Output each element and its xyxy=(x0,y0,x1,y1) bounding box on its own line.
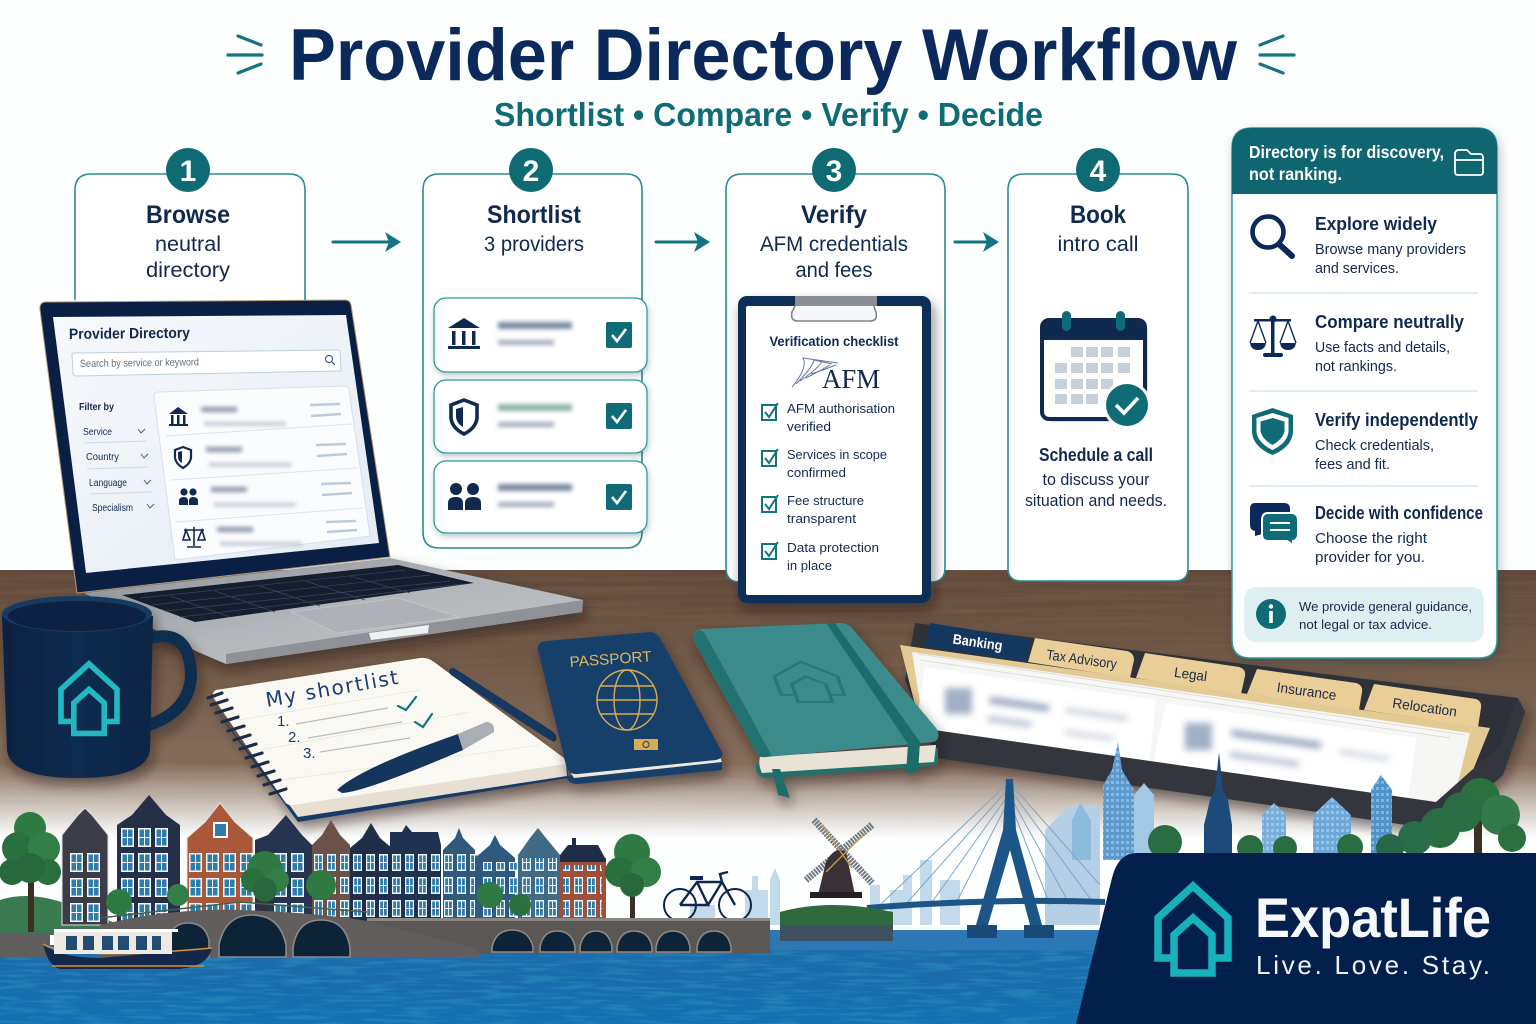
step 1 text: neutral xyxy=(155,233,221,256)
checkbox xyxy=(606,403,632,429)
clipboard clip xyxy=(792,296,877,321)
row: explore widely: Explore widely xyxy=(1315,213,1438,234)
row: verify independently xyxy=(1252,408,1479,473)
icon: people xyxy=(448,483,481,510)
house 9 xyxy=(475,835,520,925)
list numbers: 1. xyxy=(277,713,290,730)
canal bridge and quay xyxy=(0,902,770,958)
blurred provider name xyxy=(498,322,572,345)
row: decide with confidence: provider for you. xyxy=(1315,550,1425,566)
windmill xyxy=(780,820,893,941)
results list xyxy=(154,386,370,560)
notebook: my shortlist xyxy=(208,658,568,822)
icon: bank xyxy=(448,318,480,349)
wooden desk xyxy=(0,570,1536,850)
brand tagline: Live. Love. Stay. xyxy=(1256,950,1490,980)
ribbon xyxy=(772,769,790,798)
spiral binding xyxy=(208,693,286,794)
list numbers: 2. xyxy=(288,729,301,746)
icon: scales xyxy=(1250,316,1296,357)
title accent left xyxy=(228,36,262,73)
step 1 text: Browse xyxy=(146,201,230,229)
AFM logo xyxy=(792,358,880,394)
handwritten checks xyxy=(398,697,432,727)
tab: relocation xyxy=(1364,684,1481,727)
house 8 xyxy=(442,828,481,925)
trees behind logo xyxy=(1148,778,1526,862)
step 2 card: shortlist xyxy=(423,148,647,548)
paper stack xyxy=(912,652,1470,815)
notebook spine xyxy=(693,630,772,757)
bicycle xyxy=(664,872,751,921)
notebook back cover xyxy=(756,748,938,778)
checklist items: AFM authorisation xyxy=(787,401,895,416)
schedule text: Schedule a call xyxy=(1039,445,1153,465)
church tower xyxy=(1204,752,1232,860)
row: compare neutrally: not rankings. xyxy=(1315,359,1397,375)
tab: insurance xyxy=(1247,669,1362,710)
tan folder back xyxy=(900,645,1490,790)
row: explore widely xyxy=(1252,213,1466,277)
bridge deck xyxy=(867,901,1105,908)
checklist items: Fee structure xyxy=(787,493,864,508)
notebook front cover xyxy=(693,623,939,757)
tab: legal: Legal xyxy=(1173,664,1208,684)
icon: calendar check xyxy=(1103,381,1151,429)
house 7 xyxy=(390,825,442,925)
bridge cables xyxy=(880,782,1100,905)
badge 4: 4 xyxy=(1090,155,1107,188)
laptop screen xyxy=(53,315,379,573)
info note xyxy=(1244,587,1484,642)
AFM logo: AFM xyxy=(822,364,880,394)
arches xyxy=(168,915,731,958)
green notebook xyxy=(693,623,939,798)
quay wall left xyxy=(0,933,50,957)
filter sidebar: Language xyxy=(89,478,127,489)
icon: magnifier xyxy=(1252,216,1292,256)
passport xyxy=(538,632,722,784)
row: decide with confidence: Choose the right xyxy=(1315,531,1427,547)
step 4 text xyxy=(1058,201,1138,256)
checklist items: Data protection xyxy=(787,540,879,555)
info note: not legal or tax advice. xyxy=(1299,617,1432,632)
provider card: shield xyxy=(434,380,647,453)
step 4 text: intro call xyxy=(1058,233,1138,256)
icon: speech bubbles xyxy=(1250,503,1298,545)
clipboard: verification checklist xyxy=(738,296,931,603)
laptop xyxy=(40,300,583,664)
step 1 card: browse xyxy=(75,148,305,300)
screen heading: Provider Directory xyxy=(69,325,191,343)
water canal xyxy=(0,930,1110,1024)
badge 3 xyxy=(812,148,856,192)
elastic band xyxy=(826,623,920,773)
windmill sails xyxy=(806,820,872,883)
step 4 text: Book xyxy=(1070,201,1126,229)
title xyxy=(228,15,1294,96)
pen on desk xyxy=(449,668,557,742)
notebook pages xyxy=(759,745,936,773)
row: decide with confidence xyxy=(1250,502,1483,566)
house 4 xyxy=(255,815,312,925)
brand name: ExpatLife xyxy=(1255,886,1491,949)
list numbers: 3. xyxy=(303,745,316,762)
badge 2 xyxy=(509,148,553,192)
tree 4 xyxy=(106,882,531,916)
badge 1: 1 xyxy=(180,155,196,188)
info note: We provide general guidance, xyxy=(1299,599,1472,614)
checkbox xyxy=(606,322,632,348)
laptop lid xyxy=(40,300,390,593)
row: compare neutrally xyxy=(1250,311,1465,375)
house 11 xyxy=(560,838,606,925)
step 1 text xyxy=(146,201,231,282)
filter sidebar: Country xyxy=(86,452,119,463)
windmill island xyxy=(780,905,893,938)
search box: Search by service or keyword xyxy=(80,356,199,370)
icon: shield teal xyxy=(1252,408,1293,455)
file tray with tabbed dividers xyxy=(900,623,1525,830)
step 2 text: Shortlist xyxy=(487,201,582,229)
panel header: Directory is for discovery, xyxy=(1249,142,1444,162)
arrow 3 to 4 xyxy=(955,232,999,252)
badge 2: 2 xyxy=(523,155,539,188)
panel header: not ranking. xyxy=(1249,164,1342,184)
filter sidebar: Service xyxy=(83,427,112,438)
handwritten title: My shortlist xyxy=(264,665,400,712)
blurred index cards xyxy=(915,667,1416,810)
right info panel xyxy=(1232,128,1497,658)
windmill tower xyxy=(818,850,855,895)
checklist items: verified xyxy=(787,419,831,434)
schedule text: situation and needs. xyxy=(1025,492,1167,510)
tree 5 xyxy=(605,834,661,922)
embossed logo xyxy=(769,662,847,702)
tab: legal xyxy=(1136,653,1245,694)
provider card: people xyxy=(434,461,647,533)
icon: people small xyxy=(179,488,198,505)
tab: insurance: Insurance xyxy=(1276,679,1338,703)
tab: banking xyxy=(925,623,1030,662)
schedule text: to discuss your xyxy=(1042,471,1150,489)
blurred provider name xyxy=(498,404,572,427)
house 3 xyxy=(187,803,255,925)
row: verify independently: Verify independently xyxy=(1315,409,1479,430)
house 10 xyxy=(518,828,560,925)
main title text: Provider Directory Workflow xyxy=(289,15,1237,96)
checklist items: confirmed xyxy=(787,465,846,480)
step 1 text: directory xyxy=(146,259,231,282)
icon: folder xyxy=(1455,150,1483,175)
step 4 card: book xyxy=(1008,148,1188,581)
checklist heading: Verification checklist xyxy=(770,333,899,349)
checklist items: in place xyxy=(787,558,832,573)
icon: scales small xyxy=(183,527,205,547)
schedule text xyxy=(1025,445,1167,510)
badge 3: 3 xyxy=(826,155,842,188)
laptop base xyxy=(84,558,583,664)
icon: info xyxy=(1256,599,1286,629)
step 3 text: AFM credentials xyxy=(760,233,908,256)
house 5 xyxy=(312,820,351,925)
icon: calendar xyxy=(1041,311,1151,429)
mug handle xyxy=(146,636,191,726)
canal boat xyxy=(43,929,212,969)
expatlife brand block xyxy=(1076,853,1536,1024)
tab: banking: Banking xyxy=(952,631,1004,653)
title accent right xyxy=(1260,36,1294,73)
keyboard xyxy=(122,565,474,640)
filter sidebar: Specialism xyxy=(92,503,133,514)
tab: tax advisory: Tax Advisory xyxy=(1045,646,1118,672)
tree 2 xyxy=(241,851,289,910)
erasmus bridge xyxy=(867,779,1105,938)
tray front wall xyxy=(934,698,1525,829)
list numbers xyxy=(277,713,316,762)
canal houses xyxy=(62,795,606,925)
tree 3 xyxy=(306,870,336,900)
row: verify independently: Check credentials, xyxy=(1315,438,1434,454)
filter sidebar xyxy=(79,402,154,514)
arched stone bridge xyxy=(100,910,480,958)
row: decide with confidence: Decide with confidence xyxy=(1315,502,1483,523)
house 6 xyxy=(350,823,392,925)
blurred provider name xyxy=(498,484,572,507)
checklist items: Services in scope xyxy=(787,447,887,462)
trees left xyxy=(0,812,661,932)
panel header xyxy=(1232,128,1497,194)
checklist items: transparent xyxy=(787,511,856,526)
mug xyxy=(2,596,191,778)
passport globe xyxy=(597,670,657,730)
bushes behind quay xyxy=(0,896,120,935)
row: compare neutrally: Use facts and details, xyxy=(1315,340,1450,356)
provider card: bank xyxy=(434,298,647,372)
icon: shield small xyxy=(175,447,191,468)
passport chip xyxy=(634,739,658,750)
row: verify independently: fees and fit. xyxy=(1315,457,1390,473)
badge 1 xyxy=(166,148,210,192)
passport label: PASSPORT xyxy=(569,648,652,671)
icon: bank small xyxy=(169,407,188,426)
badge 4 xyxy=(1076,148,1120,192)
filter sidebar: Filter by xyxy=(79,402,114,413)
arrow 2 to 3 xyxy=(656,232,710,252)
bridge pylon xyxy=(976,779,1042,925)
pen on notebook xyxy=(337,722,494,793)
brand logo xyxy=(1158,886,1228,973)
search box xyxy=(72,350,341,376)
tray back xyxy=(905,623,1525,830)
row: explore widely: Browse many providers xyxy=(1315,242,1466,258)
house 2 xyxy=(117,795,180,925)
step 3 text: Verify xyxy=(801,201,867,229)
rotterdam skyline right xyxy=(1045,742,1392,925)
blurred rows xyxy=(201,407,302,546)
checklist items xyxy=(762,401,895,573)
subtitle: Shortlist • Compare • Verify • Decide xyxy=(494,96,1043,133)
arrow 1 to 2 xyxy=(333,232,401,252)
icon: shield xyxy=(451,400,477,434)
tab: tax advisory xyxy=(1028,638,1134,678)
row: compare neutrally: Compare neutrally xyxy=(1315,311,1465,332)
step 2 text: 3 providers xyxy=(484,233,584,256)
step 2 text xyxy=(484,201,584,256)
row: explore widely: and services. xyxy=(1315,261,1399,277)
long quay xyxy=(367,920,770,953)
step 3 card: verify xyxy=(726,148,945,582)
checkbox xyxy=(606,484,632,510)
distant skyline left xyxy=(690,860,960,925)
tab: relocation: Relocation xyxy=(1391,695,1458,719)
tree 1 xyxy=(0,812,61,932)
mug logo xyxy=(61,664,117,733)
step 3 text: and fees xyxy=(796,259,872,282)
house 1 xyxy=(62,808,108,925)
step 3 text xyxy=(760,201,908,282)
